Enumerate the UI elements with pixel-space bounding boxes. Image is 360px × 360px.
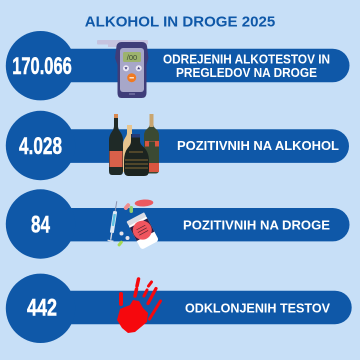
jar <box>126 212 159 250</box>
capsules <box>123 202 131 211</box>
row 1 number: 170.066 <box>12 53 72 80</box>
tablet <box>135 199 153 207</box>
icon: syringe and pills <box>108 199 159 250</box>
icon: breathalyzer: /00 <box>127 53 137 62</box>
title: ALKOHOL IN DROGE 2025 <box>85 14 275 31</box>
icon: bottles <box>109 114 159 176</box>
panel: alcohol tests <box>6 31 350 100</box>
row 1 label: ODREJENIH ALKOTESTOV IN <box>163 51 330 66</box>
row 4 number: 442 <box>27 295 57 322</box>
row 1 circle <box>6 31 75 100</box>
row 2 circle <box>6 111 75 180</box>
row 2 label: POZITIVNIH NA ALKOHOL <box>177 138 339 153</box>
row 3 circle <box>6 189 75 259</box>
row 2 number: 4.028 <box>19 133 62 160</box>
row 3 bar <box>40 208 350 241</box>
row 1 label: PREGLEDOV NA DROGE <box>176 65 317 80</box>
row 1 bar <box>40 49 350 82</box>
syringe <box>108 201 120 241</box>
row 4 bar <box>40 291 352 324</box>
panel: refused tests <box>6 274 352 343</box>
icon: red hand <box>117 279 160 333</box>
panel: positive drugs <box>6 189 350 259</box>
row 4 circle <box>6 274 75 343</box>
panel: positive alcohol <box>6 111 349 180</box>
row 3 number: 84 <box>31 212 50 239</box>
row 2 bar <box>40 129 349 163</box>
icon: breathalyzer <box>97 40 148 98</box>
row 4 label: ODKLONJENIH TESTOV <box>185 300 330 315</box>
row 3 label: POZITIVNIH NA DROGE <box>183 217 330 232</box>
